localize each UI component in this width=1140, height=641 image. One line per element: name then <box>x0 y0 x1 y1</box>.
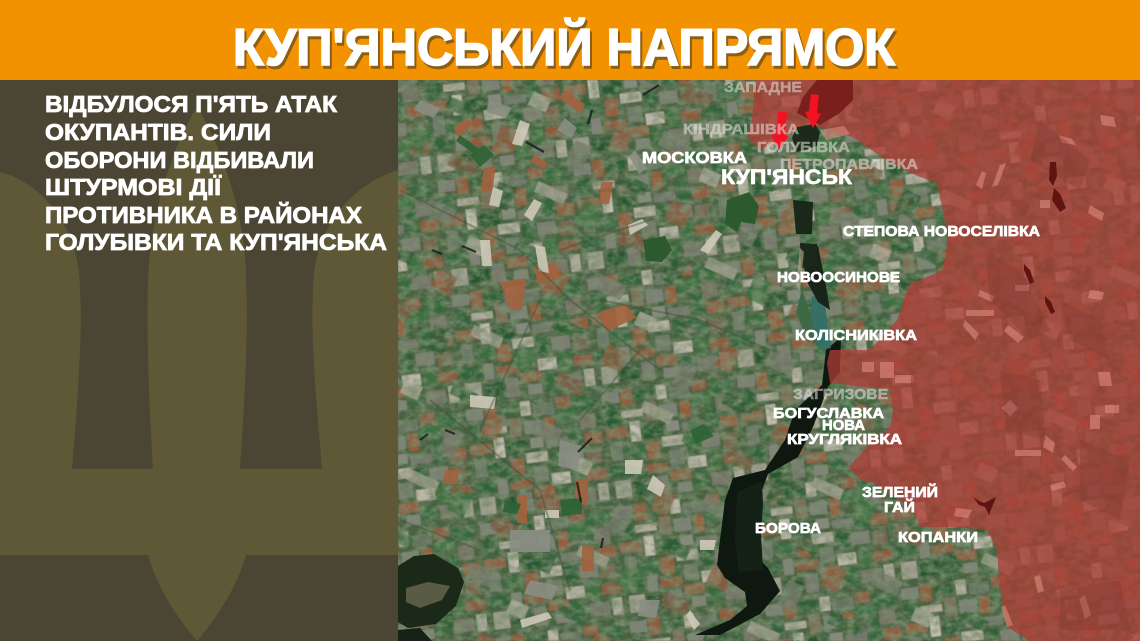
left panel <box>0 80 398 641</box>
occupied territory (red zone) <box>747 80 1140 641</box>
text block: summary: ВІДБУЛОСЯ П'ЯТЬ АТАК <box>45 91 338 117</box>
map label: Колісниківка: КОЛІСНИКІВКА <box>795 327 917 344</box>
forest: south-west corner <box>398 554 464 641</box>
gullies and roads <box>420 85 659 548</box>
map label: Куп'янськ: КУП'ЯНСЬК <box>721 166 852 189</box>
map label: Кіндрашівка: КІНДРАШІВКА <box>683 121 799 138</box>
dark forest at Holubivka <box>792 124 820 152</box>
map label: Борова: БОРОВА <box>755 520 821 537</box>
map label: Голубівка: ГОЛУБІВКА <box>757 139 850 156</box>
field details <box>414 90 722 630</box>
river and reservoir <box>695 200 841 635</box>
map label: Копанки: КОПАНКИ <box>898 529 978 546</box>
title: КУП'ЯНСЬКИЙ НАПРЯМОК <box>233 18 895 77</box>
arrow: attack south <box>771 112 789 149</box>
text block: summary: ОБОРОНИ ВІДБИВАЛИ <box>45 147 314 173</box>
map label: Нова: НОВА <box>822 417 865 434</box>
text block: summary: ГОЛУБІВКИ ТА КУП'ЯНСЬКА <box>45 229 387 255</box>
map label: Петропавлівка: ПЕТРОПАВЛІВКА <box>780 156 918 173</box>
text block: summary: ШТУРМОВІ ДІЇ <box>45 174 222 200</box>
map label: Западне: ЗАПАДНЕ <box>724 79 802 96</box>
arrow: attack north <box>805 94 821 128</box>
map label: Московка: МОСКОВКА <box>642 150 747 167</box>
map label: Зелений: ЗЕЛЕНИЙ <box>862 483 938 501</box>
map label: Загризове: ЗАГРИЗОВЕ <box>793 386 888 403</box>
header banner <box>0 0 1140 80</box>
map label: Богуславка: БОГУСЛАВКА <box>773 405 884 422</box>
pink fields inside red zone <box>820 115 1119 627</box>
map label: Новоосинове: НОВООСИНОВЕ <box>777 269 900 286</box>
map label: Кругляківка: КРУГЛЯКІВКА <box>787 431 902 448</box>
gullies in red zone <box>973 162 1066 515</box>
green forests <box>643 192 759 262</box>
text block: summary <box>45 91 387 255</box>
text block: summary: ПРОТИВНИКА В РАЙОНАХ <box>45 201 363 228</box>
map label: Степова Новоселівка: СТЕПОВА НОВОСЕЛІВКА <box>843 223 1040 240</box>
dark occupied fields <box>985 120 1130 630</box>
icon: trident emblem <box>0 107 398 641</box>
dark red area near Western settlement <box>797 80 853 125</box>
map label: Гай: ГАЙ <box>884 498 915 516</box>
text block: summary: ОКУПАНТІВ. СИЛИ <box>45 119 271 145</box>
satellite map <box>398 79 1140 641</box>
